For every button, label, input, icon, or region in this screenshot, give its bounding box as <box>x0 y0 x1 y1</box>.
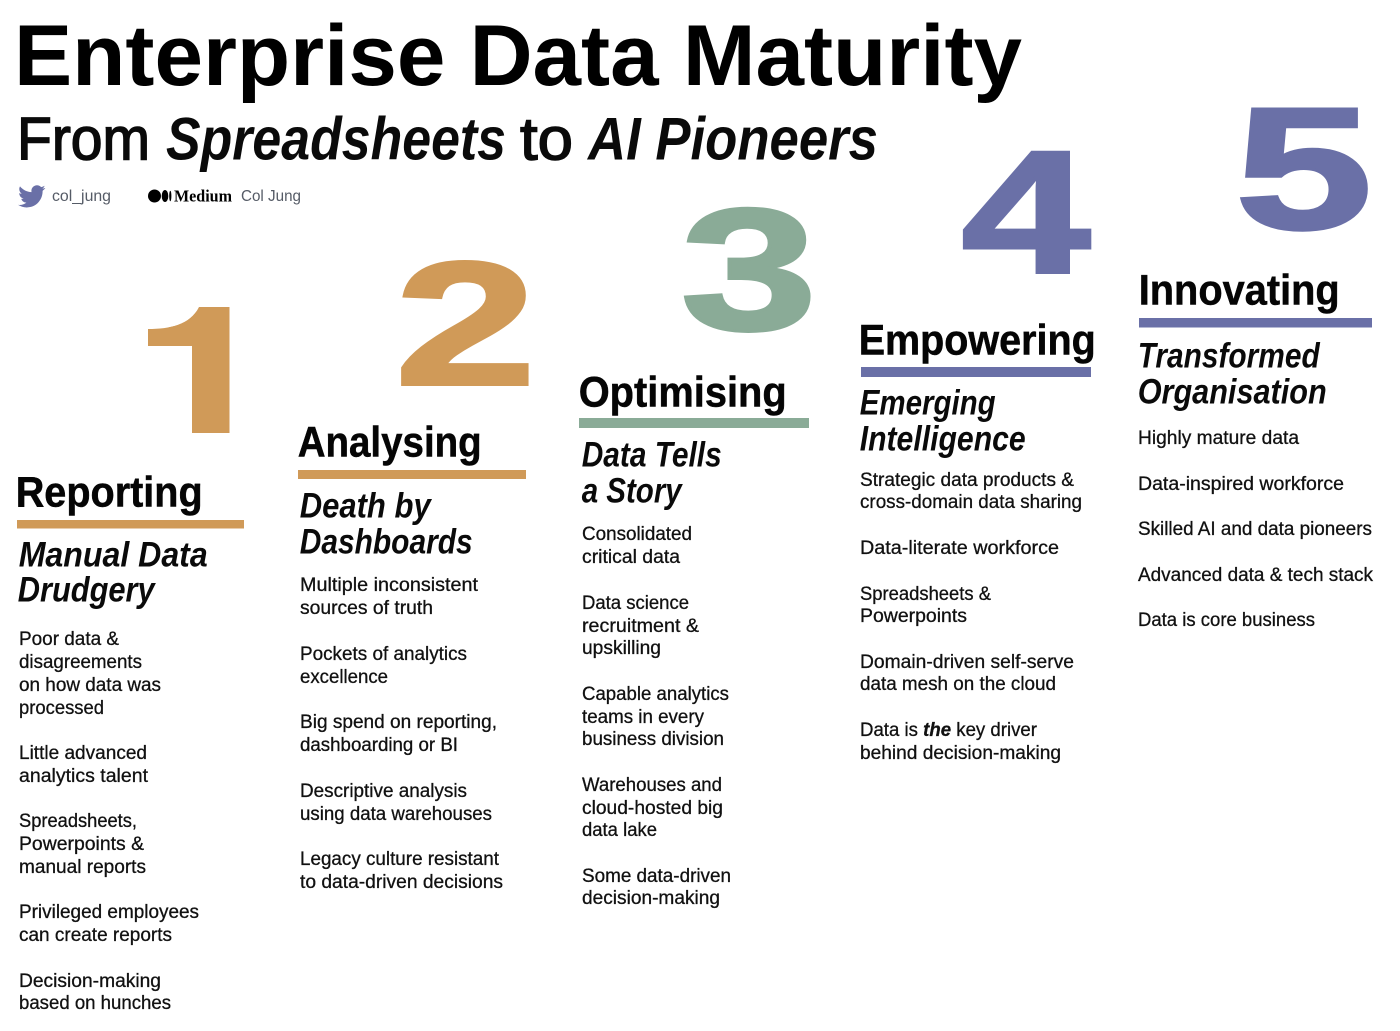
heading: analysing: Analysing <box>298 418 482 466</box>
bullet list: Data-inspired workforce <box>1138 473 1344 495</box>
subheading <box>860 384 1026 459</box>
bullet list: Legacy culture resistant <box>300 848 500 870</box>
medium wordmark: Medium <box>174 186 232 206</box>
bullet list: data mesh on the cloud <box>860 673 1056 695</box>
bullet list: Advanced data & tech stack <box>1138 564 1373 586</box>
rule <box>1139 318 1372 328</box>
number 1: 1 <box>146 263 281 496</box>
bullet list: Data-literate workforce <box>860 537 1059 559</box>
heading: reporting: Reporting <box>16 468 203 516</box>
bullet list: cloud-hosted big <box>582 797 723 819</box>
icon: twitter bird <box>18 185 45 207</box>
subheading: Dashboards <box>300 523 473 562</box>
bullet list: cross-domain data sharing <box>860 491 1082 513</box>
bullet list: Data science <box>582 592 689 614</box>
bullet list: excellence <box>300 666 388 688</box>
number 5: 5 <box>1235 72 1373 266</box>
number 3: 3 <box>680 173 817 367</box>
number 2: 2 <box>394 226 537 422</box>
bullet list: based on hunches <box>19 992 171 1014</box>
subheading <box>300 487 473 562</box>
subheading <box>18 536 208 610</box>
bullet list: Skilled AI and data pioneers <box>1138 518 1372 540</box>
bullet list: Pockets of analytics <box>300 643 467 665</box>
bullet list: Strategic data products & <box>860 469 1074 491</box>
bullet list: on how data was <box>19 674 161 696</box>
panel: stage 3 optimising <box>579 173 817 909</box>
bullet list: Warehouses and <box>582 774 722 796</box>
bullet list: Poor data & <box>19 628 119 650</box>
bullet list: Highly mature data <box>1138 427 1299 449</box>
bullet list: Decision-making <box>19 970 161 992</box>
heading: innovating: Innovating <box>1139 266 1340 314</box>
bullet list: Privileged employees <box>19 901 199 923</box>
subheading <box>1138 337 1327 412</box>
bullet list: analytics talent <box>19 765 149 787</box>
bullet list: disagreements <box>19 651 142 673</box>
subheading: Data Tells <box>582 436 722 475</box>
bullet list: using data warehouses <box>300 803 492 825</box>
bullet list: Little advanced <box>19 742 147 764</box>
bullet list: recruitment & <box>582 615 699 637</box>
twitter handle: col_jung <box>52 188 111 205</box>
bullet list: dashboarding or BI <box>300 734 458 756</box>
social credits <box>18 185 301 207</box>
bullet list: Big spend on reporting, <box>300 711 497 733</box>
bullet list <box>19 628 199 1014</box>
subtitle: to <box>520 106 573 172</box>
bullet list <box>582 523 731 909</box>
subheading: Emerging <box>860 384 996 423</box>
medium author: Col Jung <box>241 188 301 205</box>
subheading: Drudgery <box>18 571 156 610</box>
bullet list: Data is the key driver <box>860 719 1037 741</box>
panel: stage 1 reporting <box>17 307 244 1010</box>
bullet list: processed <box>19 697 104 719</box>
bullet list: Spreadsheets & <box>860 583 991 605</box>
bullet list: Spreadsheets, <box>19 810 137 832</box>
bullet list: upskilling <box>582 637 661 659</box>
subheading: Organisation <box>1138 373 1327 412</box>
bullet list: behind decision-making <box>860 742 1061 764</box>
subheading: Death by <box>300 487 432 526</box>
bullet list: Powerpoints <box>860 605 967 627</box>
bullet list: sources of truth <box>300 597 433 619</box>
title: Enterprise Data Maturity <box>14 8 1022 104</box>
bullet list: manual reports <box>19 856 146 878</box>
bullet list: Multiple inconsistent <box>300 574 479 596</box>
bullet list: Capable analytics <box>582 683 729 705</box>
bullet list: can create reports <box>19 924 172 946</box>
subtitle: AI Pioneers <box>586 106 878 172</box>
subheading <box>582 436 722 511</box>
bullet list: Consolidated <box>582 523 692 545</box>
subheading: Manual Data <box>19 536 208 575</box>
subheading: a Story <box>582 472 683 511</box>
bullet list <box>300 574 503 893</box>
bullet list <box>1138 427 1373 631</box>
heading: empowering: Empowering <box>859 316 1096 364</box>
bullet list: to data-driven decisions <box>300 871 503 893</box>
heading: optimising: Optimising <box>579 368 787 416</box>
subtitle: Spreadsheets <box>166 106 506 172</box>
subheading: Transformed <box>1138 337 1320 376</box>
rule <box>298 470 526 479</box>
rule <box>861 367 1091 377</box>
panel: stage 2 analysing <box>298 226 537 893</box>
subtitle <box>17 106 878 172</box>
panel: stage 5 innovating <box>1138 72 1373 631</box>
panel: stage 4 empowering <box>859 114 1096 764</box>
subheading: Intelligence <box>860 420 1026 459</box>
bullet list: Some data-driven <box>582 865 731 887</box>
icon: medium logo <box>148 190 171 202</box>
bullet list <box>860 469 1082 764</box>
rule <box>579 418 809 428</box>
bullet list: Powerpoints & <box>19 833 144 855</box>
subtitle: From <box>17 106 150 172</box>
bullet list: data lake <box>582 819 657 841</box>
bullet list: Domain-driven self-serve <box>860 651 1074 673</box>
rule <box>17 520 244 528</box>
bullet list: business division <box>582 728 724 750</box>
bullet list: Data is core business <box>1138 609 1315 631</box>
number 1 <box>148 307 230 433</box>
bullet list: Descriptive analysis <box>300 780 467 802</box>
number 4: 4 <box>961 114 1091 310</box>
bullet list: decision-making <box>582 887 720 909</box>
bullet list: critical data <box>582 546 680 568</box>
bullet list: teams in every <box>582 706 704 728</box>
